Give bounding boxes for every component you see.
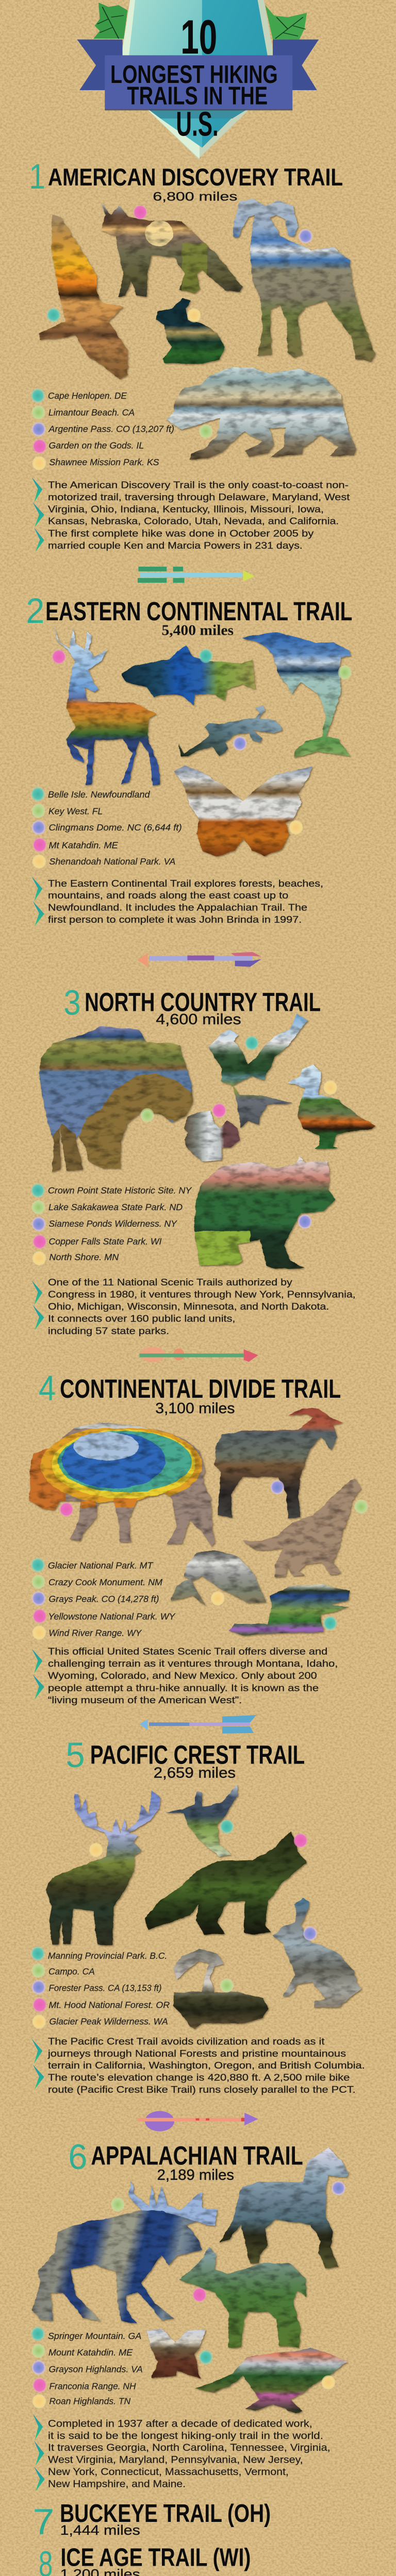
animal: mountain goat [214, 1409, 342, 1518]
arrow divider [138, 2111, 258, 2131]
chevrons [31, 1280, 44, 1330]
legend: locations: Wind River Range. WY [49, 1628, 142, 1638]
legend: locations: Shawnee Mission Park. KS [50, 457, 159, 467]
title text: 10 [180, 10, 217, 64]
Pacific Crest body text [47, 2037, 365, 2095]
trail 8: Ice Age Trail: ICE AGE TRAIL (WI) [61, 2544, 251, 2572]
Pacific Crest body text: journeys through National Forests and pristine mountainous [47, 2048, 346, 2059]
animal: bison geyser [25, 1421, 214, 1547]
number 6: 6 [68, 2138, 87, 2177]
legend: locations: Crown Point State Historic Site. NY [48, 1185, 192, 1195]
legend: locations: Springer Mountain. GA [48, 2331, 141, 2341]
icon: shield badge [121, 0, 274, 159]
panel: Appalachian body text and trails 7-10 [18, 2414, 394, 2576]
animal: rabbit [155, 298, 225, 364]
title text: U.S. [176, 105, 219, 143]
animal: whale [171, 1550, 267, 1606]
Appalachian body text: It traverses Georgia, North Carolina, Tennessee, Virginia, [48, 2442, 331, 2453]
body text: people attempt a thru-hike annually. It is known as the [48, 1683, 319, 1693]
legend: locations: Franconia Range. NH [50, 2381, 136, 2391]
chevrons [31, 477, 44, 552]
Pacific Crest body text: The Pacific Crest Trail avoids civilization and roads as it [48, 2037, 325, 2047]
miles: 4,600 miles [156, 1011, 241, 1028]
animal: elk [45, 1790, 160, 1945]
animal: walking wolf [101, 203, 242, 296]
body text: including 57 state parks. [48, 1326, 169, 1336]
arrow divider [138, 952, 261, 967]
arrow divider [139, 1347, 258, 1362]
legend: locations: Campo. CA [48, 1967, 95, 1976]
legend: locations: Clingmans Dome. NC (6,644 ft) [49, 822, 182, 833]
legend: locations: North Shore. MN [50, 1252, 119, 1262]
Appalachian body text: New Hampshire, and Maine. [48, 2479, 186, 2489]
animal: snake [173, 1949, 269, 2029]
legend: locations: Glacier National Park. MT [48, 1561, 154, 1570]
location markers [47, 205, 312, 438]
body text: motorized trail, traversing through Delaware, Maryland, West [48, 492, 350, 503]
chevrons [31, 876, 44, 926]
panel: Continental Divide Trail [25, 1347, 368, 1706]
body text: mountains, and roads along the east coast up to [48, 891, 288, 901]
trail 8: Ice Age Trail [39, 2544, 251, 2576]
location markers [60, 1480, 368, 1630]
legend: locations: Limantour Beach. CA [48, 408, 135, 417]
animal: dolphin [242, 632, 351, 758]
number 3: 3 [63, 983, 81, 1023]
legend: locations: Shenandoah National Park. VA [50, 857, 175, 867]
chevrons [33, 2414, 45, 2492]
animal: eagle [208, 1013, 308, 1128]
animal: bird sunset [39, 215, 127, 379]
panel: Eastern Continental Trail [26, 591, 352, 926]
body text: The American Discovery Trail is the only coast-to-coast non- [48, 480, 349, 490]
panel: American Discovery Trail heading [29, 157, 343, 204]
chevrons [31, 2039, 44, 2090]
animal: fish [122, 646, 255, 705]
location markers [140, 1036, 337, 1229]
animal: deer [179, 2247, 307, 2347]
animal: moose [32, 2180, 217, 2324]
trail 7: Buckeye Trail [33, 2499, 271, 2542]
animal: duck [287, 1064, 375, 1149]
panel: Appalachian Trail [31, 2037, 365, 2413]
legend: locations [31, 1183, 192, 1265]
miles: 5,400 miles [161, 622, 234, 638]
location markers [52, 649, 352, 835]
legend: locations: Mt. Hood National Forest. OR [49, 2000, 170, 2010]
legend: locations: Grays Peak. CO (14,278 ft) [49, 1594, 159, 1604]
miles: 6,800 miles [153, 190, 237, 204]
body text: challenging terrain as it ventures through Montana, Idaho, [48, 1659, 338, 1669]
body text [48, 1278, 356, 1336]
body text: It connects over 160 public land units, [48, 1314, 235, 1324]
number 2: 2 [26, 591, 44, 631]
legend: locations [31, 787, 182, 869]
animal: horse [219, 2147, 349, 2268]
animal: hummingbird [166, 1785, 237, 1857]
legend: locations [31, 1558, 176, 1640]
animal: running fox [194, 2348, 347, 2413]
body text [48, 480, 350, 551]
legend: locations: Roan Highlands. TN [50, 2396, 131, 2406]
body text: “living museum of the American West”. [48, 1695, 242, 1706]
Appalachian body text [48, 2418, 331, 2489]
animal: bison lake [39, 1026, 194, 1178]
animal: butterfly [174, 765, 312, 856]
animal: lizard [178, 705, 283, 757]
legend: locations [31, 1946, 170, 2029]
panel: title badge [77, 0, 319, 159]
animal: bear forest [192, 1157, 336, 1269]
ribbon [77, 40, 319, 111]
panel: Pacific Crest Trail [31, 1715, 361, 2029]
legend: locations: Argentine Pass. CO (13,207 ft) [48, 424, 174, 434]
body text: The Eastern Continental Trail explores forests, beaches, [48, 878, 323, 889]
trail 7: Buckeye Trail: 7 [33, 2501, 54, 2542]
panel: North Country Trail [31, 952, 375, 1336]
body text: Wyoming, Colorado, and New Mexico. Only about 200 [48, 1671, 317, 1681]
body text: Kansas, Nebraska, Colorado, Utah, Nevada, and California. [48, 516, 339, 527]
number 1: 1 [29, 157, 45, 196]
legend: locations: Mount Katahdin. ME [48, 2348, 133, 2358]
animal: jackrabbit [273, 1898, 361, 2008]
Pacific Crest body text: The route’s elevation change is 420,880 ft. A 2,500 mile bike [48, 2073, 350, 2083]
legend: locations [31, 2327, 143, 2409]
Pacific Crest body text: route (Pacific Crest Bike Trail) runs closely parallel to the PCT. [48, 2085, 356, 2095]
body text: This official United States Scenic Trail offers diverse and [48, 1647, 327, 1657]
body text: Ohio, Michigan, Wisconsin, Minnesota, and North Dakota. [48, 1302, 329, 1312]
heading: APPALACHIAN TRAIL [91, 2141, 303, 2171]
Appalachian body text: Completed in 1937 after a decade of dedicated work, [48, 2418, 312, 2429]
animal: butterfly [146, 2328, 206, 2379]
number 5: 5 [65, 1736, 85, 1775]
trail 7: Buckeye Trail: 1,444 miles [60, 2522, 140, 2538]
legend: locations: Garden on the Gods. IL [49, 440, 144, 451]
Appalachian body text: West Virginia, Maryland, Pennsylvania, New Jersey, [48, 2454, 303, 2465]
animal: howling wolf [242, 1478, 361, 1578]
legend: locations: Grayson Highlands. VA [49, 2364, 143, 2374]
legend: locations: Lake Sakakawea State Park. ND [48, 1202, 183, 1212]
body text [48, 878, 323, 925]
icon: left leaf [93, 3, 127, 39]
body text: The first complete hike was done in October 2005 by [48, 529, 314, 539]
location markers [111, 2181, 345, 2389]
Appalachian body text: it is said to be the longest hiking-only trail in the world. [48, 2430, 323, 2441]
arrow divider [140, 1715, 256, 1734]
Appalachian body text: New York, Connecticut, Massachusetts, Vermont, [48, 2466, 289, 2477]
title text [110, 10, 278, 143]
body text: One of the 11 National Scenic Trails authorized by [48, 1278, 292, 1288]
legend: locations: Yellowstone National Park. WY [48, 1612, 176, 1621]
panel: American Discovery Trail [31, 198, 375, 583]
legend: locations [31, 388, 174, 470]
body text: married couple Ken and Marcia Powers in 231 days. [48, 540, 303, 551]
body text: first person to complete it was John Brinda in 1997. [48, 915, 302, 925]
animal: beaver [228, 1585, 350, 1636]
body text: Virginia, Ohio, Indiana, Kentucky, Illinois, Missouri, Iowa, [48, 504, 324, 515]
title text: TRAILS IN THE [127, 82, 268, 110]
legend: locations: Copper Falls State Park. WI [49, 1236, 161, 1247]
location markers [89, 1819, 317, 1993]
animal: fox [145, 1832, 307, 1935]
legend: locations: Mt Katahdin. ME [49, 840, 119, 850]
Pacific Crest body text: terrain in California, Washington, Oregon, and British Columbia. [48, 2061, 365, 2071]
legend: locations: Crazy Cook Monument. NM [48, 1578, 163, 1587]
legend: locations: Cape Henlopen. DE [48, 391, 127, 401]
legend: locations: Glacier Peak Wilderness. WA [50, 2016, 168, 2026]
animal: bear coast [167, 367, 356, 460]
miles: 3,100 miles [155, 1400, 235, 1417]
legend: locations: Forester Pass. CA (13,153 ft) [49, 1983, 161, 1993]
legend: locations: Manning Provincial Park. B.C. [48, 1951, 167, 1961]
icon: right leaf [265, 5, 307, 40]
body text [48, 1647, 338, 1706]
body text: Newfoundland. It includes the Appalachian Trail. The [48, 903, 307, 913]
heading: PACIFIC CREST TRAIL [90, 1740, 305, 1770]
miles: 2,189 miles [157, 2167, 234, 2183]
number 4: 4 [39, 1369, 56, 1408]
legend: locations: Belle Isle. Newfoundland [48, 790, 150, 800]
miles: 2,659 miles [154, 1765, 236, 1781]
animal: deer [54, 623, 160, 785]
animal: bighorn [234, 198, 375, 362]
chevrons [31, 1649, 44, 1699]
legend: locations: Key West. FL [48, 806, 103, 817]
arrow divider [138, 567, 255, 583]
legend: locations: Siamese Ponds Wilderness. NY [49, 1218, 178, 1229]
body text: Congress in 1980, it ventures through New York, Pennsylvania, [48, 1290, 356, 1300]
animal: squirrel [183, 1110, 240, 1161]
